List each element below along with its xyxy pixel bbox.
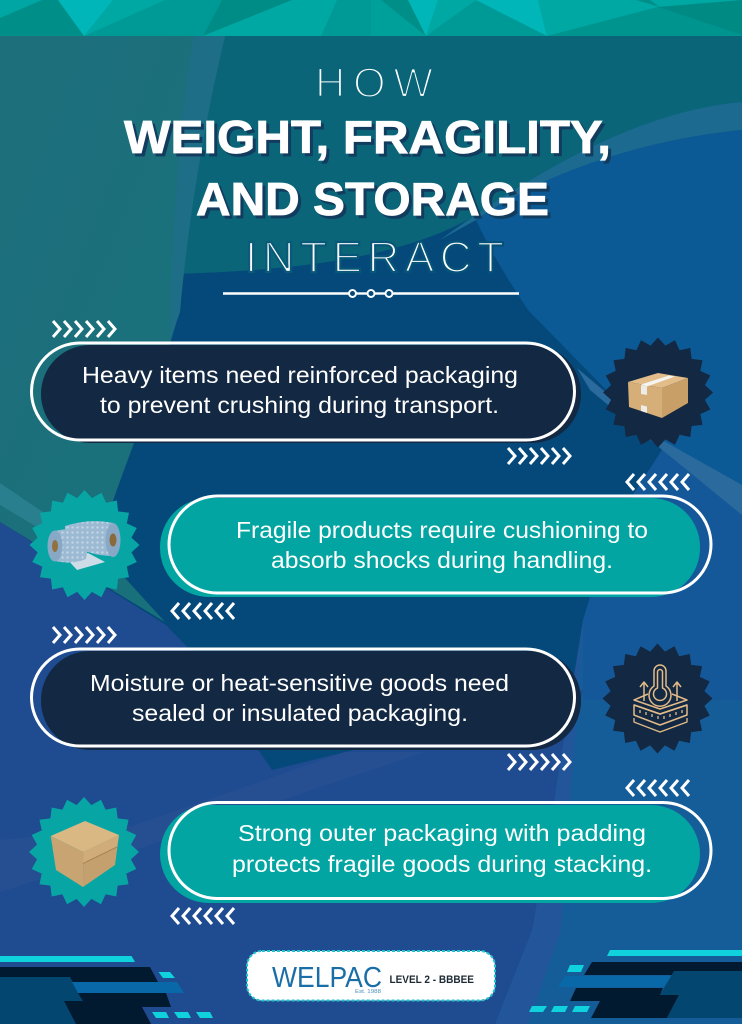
logo badge xyxy=(247,951,495,1000)
top polygon band xyxy=(0,0,742,36)
pill: white outline xyxy=(32,343,574,440)
title line: HOW: HOW xyxy=(315,59,433,106)
text: strong outer packaging: protects fragile goods during stacking. xyxy=(232,851,652,877)
icon: thermometer and insulation layers xyxy=(634,665,687,732)
arrows: top chevrons xyxy=(627,474,689,490)
panel: strong outer packaging xyxy=(160,780,711,924)
pill: dark fill xyxy=(41,345,581,443)
text: heavy items: to prevent crushing during transport. xyxy=(100,392,499,418)
badge: closed box xyxy=(29,797,139,907)
icon: bubble wrap rolls xyxy=(48,521,120,570)
logo established date: Est. 1988 xyxy=(355,989,381,995)
text: heavy items: Heavy items need reinforced packaging xyxy=(82,362,518,388)
title line: WEIGHT, FRAGILITY,: WEIGHT, FRAGILITY, xyxy=(124,111,611,163)
title line: INTERACT: INTERACT xyxy=(245,233,504,282)
arrows: bottom chevrons xyxy=(172,908,234,924)
pill: white outline xyxy=(169,496,711,593)
pill: teal fill xyxy=(160,498,700,597)
text: strong outer packaging: Strong outer packaging with padding xyxy=(238,820,646,846)
title line: AND STORAGE: AND STORAGE xyxy=(196,173,549,225)
panel: fragile products xyxy=(160,474,711,619)
text: fragile products: absorb shocks during handling. xyxy=(271,547,613,573)
arrows: bottom chevrons xyxy=(508,448,570,464)
footer graphic: left xyxy=(0,956,213,1024)
pill: white outline xyxy=(169,802,711,898)
arrows: bottom chevrons xyxy=(508,754,570,770)
arrows: top chevrons xyxy=(53,627,115,643)
arrows: bottom chevrons xyxy=(172,603,234,619)
pill: white outline xyxy=(32,649,574,746)
icon: cardboard box xyxy=(628,373,688,418)
arrows: top chevrons xyxy=(53,321,115,337)
footer graphic: right xyxy=(529,950,742,1018)
text: fragile products: Fragile products require cushioning to xyxy=(236,517,648,543)
logo wordmark: WELPAC xyxy=(272,962,382,994)
badge: bubble wrap xyxy=(30,490,140,600)
panel: heavy items xyxy=(32,321,581,464)
pill: teal fill xyxy=(160,805,700,903)
icon: closed box xyxy=(51,821,119,887)
text: moisture or heat: sealed or insulated packaging. xyxy=(132,700,468,726)
text: moisture or heat: Moisture or heat-sensitive goods need xyxy=(90,670,509,696)
title divider xyxy=(223,290,519,297)
title xyxy=(124,59,611,282)
arrows: top chevrons xyxy=(627,780,689,796)
pill: dark fill xyxy=(41,651,581,750)
panel: moisture or heat xyxy=(32,627,581,770)
badge: cardboard box xyxy=(603,338,713,448)
logo level label: LEVEL 2 - BBBEE xyxy=(390,974,474,986)
badge: insulation xyxy=(602,644,712,754)
